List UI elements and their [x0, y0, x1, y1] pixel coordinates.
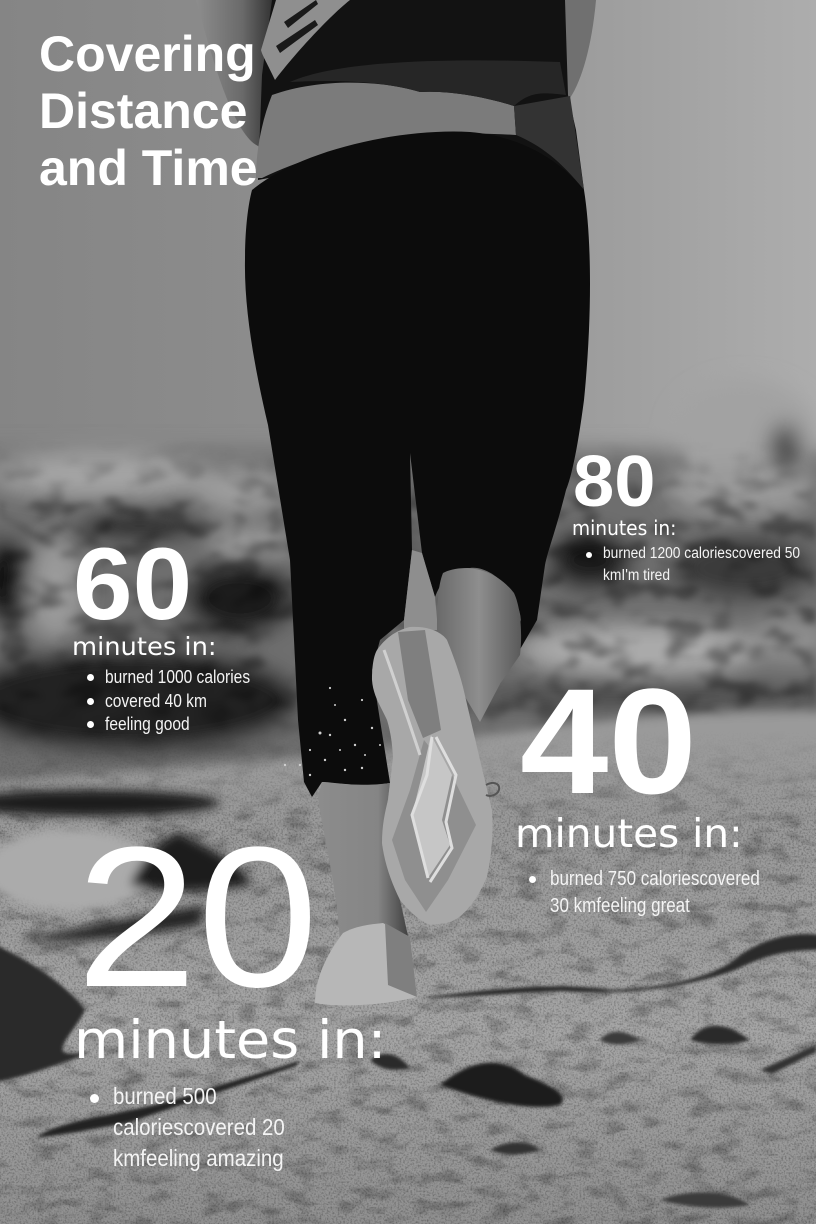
bullet list: kmI'm tired — [603, 567, 670, 584]
bullet list — [529, 868, 760, 917]
sky — [0, 0, 816, 480]
title: Distance — [39, 83, 247, 139]
bullet list: burned 750 caloriescovered — [550, 868, 760, 890]
arms and torso — [196, 0, 280, 150]
bullet list: burned 1200 caloriescovered 50 — [603, 545, 800, 562]
number 40: 40 — [520, 657, 697, 825]
runner — [196, 0, 596, 1005]
bullet list: kmfeeling amazing — [113, 1145, 284, 1171]
blurred shoreline rocks — [0, 380, 816, 800]
bullet list: covered 40 km — [105, 691, 207, 711]
label: minutes in: — [74, 1010, 386, 1071]
number 60: 60 — [73, 527, 192, 641]
number 20: 20 — [76, 806, 318, 1029]
raised calf — [437, 568, 521, 722]
bullet list: burned 500 — [113, 1083, 217, 1109]
block: 40 minutes — [515, 657, 760, 917]
speckles on leggings — [284, 687, 381, 776]
block: 80 minutes — [572, 442, 800, 584]
bullet list: 30 kmfeeling great — [550, 895, 690, 917]
bullet list — [90, 1083, 285, 1171]
bullet list: caloriescovered 20 — [113, 1114, 285, 1140]
raised shoe sole — [372, 627, 493, 925]
sand — [0, 711, 816, 1224]
title — [39, 26, 258, 196]
leggings — [245, 132, 590, 797]
bullet list: burned 1000 calories — [105, 667, 250, 687]
label: minutes in: — [72, 632, 217, 661]
sand texture — [0, 730, 816, 1224]
bullet list: feeling good — [105, 714, 190, 734]
shoe lace loop — [486, 783, 499, 796]
label: minutes in: — [515, 812, 743, 857]
title: Covering — [39, 26, 256, 82]
title: and Time — [39, 140, 258, 196]
blurred rock mottling — [0, 451, 816, 733]
rocks and shadows on the sand — [0, 790, 252, 941]
planted shoe — [315, 923, 417, 1005]
lower leg — [318, 782, 410, 945]
bullet list — [87, 667, 250, 734]
label: minutes in: — [572, 516, 676, 540]
bullet list — [586, 545, 800, 584]
block: 20 minutes — [74, 806, 386, 1171]
block: 60 minutes — [72, 527, 250, 734]
gap between the legs — [404, 550, 438, 630]
number 80: 80 — [573, 442, 655, 522]
